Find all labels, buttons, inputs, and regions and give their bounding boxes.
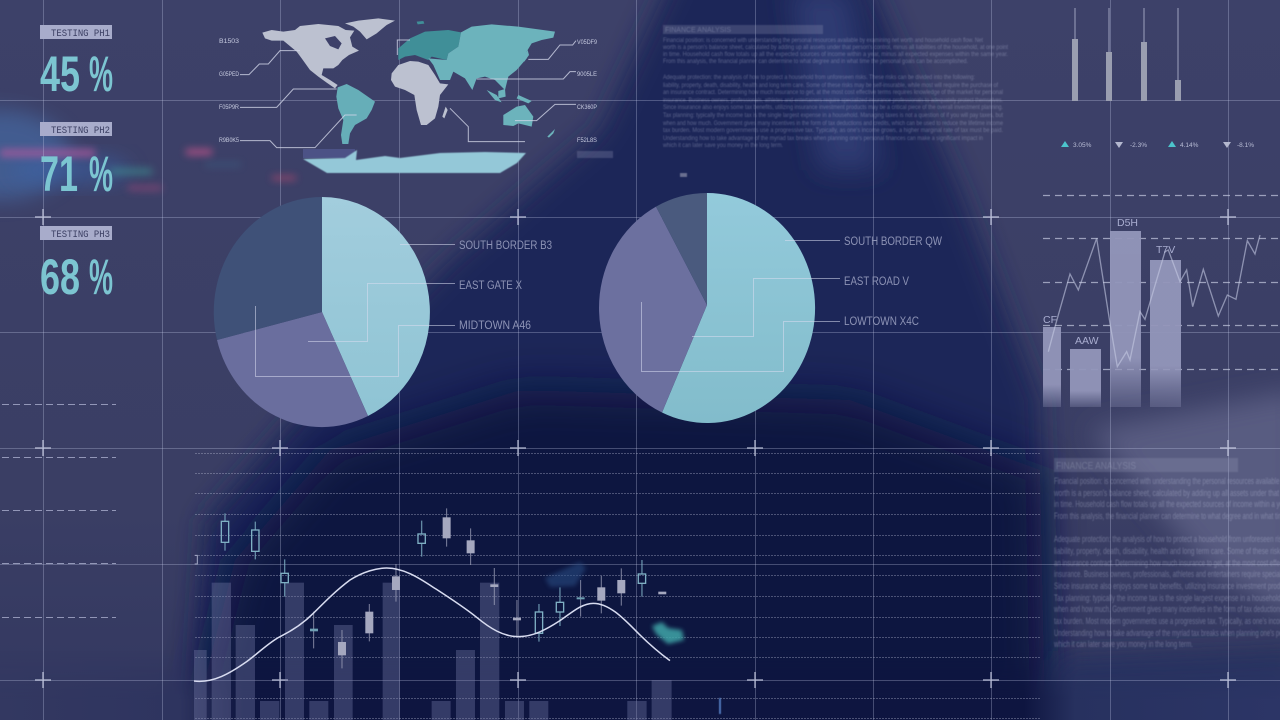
bar labels: AAW (1075, 335, 1099, 347)
map: north america (262, 24, 359, 88)
stat: testing phase 2: % (89, 146, 113, 202)
chart: right bar and line combo (1043, 217, 1260, 407)
pie labels: EAST ROAD V (844, 276, 909, 288)
map: antarctica shade bar (303, 149, 355, 158)
small bracket mark (195, 555, 197, 564)
map: australia (503, 105, 533, 127)
map: borneo (498, 89, 506, 98)
text block: top finance analysis: From this analysis, the financial planner can determine to what degree and in what time the personal goals can be accomplished. (663, 59, 968, 65)
bar labels: CF (1043, 314, 1057, 326)
pie labels (459, 240, 552, 332)
pie labels: SOUTH BORDER QW (844, 236, 942, 248)
bar labels (1043, 217, 1175, 347)
indicator: up 3.05 (1061, 141, 1092, 149)
stat: testing phase 1: % (89, 46, 113, 102)
pie leader lines (642, 240, 840, 372)
text block: top finance analysis: when and how much. Government gives many incentives in the form of tax deductions and credits, which can be used to reduce the lifetime income (662, 121, 1004, 127)
text block: top finance analysis: Tax planning: typically the income tax is the single largest expense in a household. Managing taxes is not a question of if you will pay taxes, but (663, 113, 1003, 119)
slice: east gate x (214, 197, 322, 340)
pie labels (844, 236, 942, 328)
blurred dark blue artifact (545, 562, 586, 587)
text block: top finance analysis: worth is a person's balance sheet, calculated by adding up all assets under that person's control, minus all liabilities of the household, at one point (662, 45, 1008, 51)
map: africa (391, 61, 448, 125)
pie labels: MIDTOWN A46 (459, 320, 531, 332)
stat: testing phase 2: TESTING PH2 (51, 126, 110, 137)
text block: top finance analysis: FINANCE ANALYSIS (665, 27, 731, 34)
stat: testing phase 2: 71 (40, 146, 78, 202)
map region codes (219, 38, 598, 144)
slice: south border b3 (322, 197, 430, 416)
bottom bright spark (719, 698, 721, 714)
map: madagascar (442, 107, 448, 118)
text block: top finance analysis: insurance. Business owners, professionals, athletes and entertainers require specialized insurance professionals to adequately protect themselves. (663, 98, 1003, 104)
map: americas and greenland (262, 18, 395, 144)
map: new zealand (547, 129, 555, 138)
map region codes: 9005LE (577, 71, 598, 78)
map: greenland (345, 18, 395, 39)
indicator: down 2.3: -2.3% (1130, 142, 1147, 149)
blurred teal artifact (652, 622, 684, 644)
lens flare streaks (0, 110, 296, 200)
stat: testing phase 3: TESTING PH3 (51, 230, 110, 241)
map small faint marker (577, 151, 613, 158)
smooth curve (194, 568, 670, 681)
text block: top finance analysis: Understanding how to take advantage of the myriad tax breaks when planning one's personal finances can make a significant impact in (663, 136, 983, 142)
world map (219, 18, 613, 173)
text block: top finance analysis: liability, property, death, disability, health and long term care. Some of these risks may be self-insurable, while most will require the purchase of (663, 83, 998, 89)
text block: top finance analysis: Since insurance also enjoys some tax benefits, utilizing insurance investment products may be a critical piece of the overall investment planning. (663, 105, 1003, 111)
text block: top finance analysis: tax burden. Most modern governments use a progressive tax. Typically, as one's income grows, a higher marginal rate of tax must be paid. (663, 128, 1003, 134)
map: iceland (417, 21, 424, 24)
left dashed rule stack (2, 404, 116, 618)
stat: testing phase 3: 68 (40, 249, 80, 305)
slice: south border qw (662, 193, 815, 423)
map region codes: B1503 (219, 38, 239, 45)
chart: right pie (599, 193, 942, 423)
bars (1043, 231, 1181, 407)
map: south america (336, 84, 375, 144)
chart: bottom bars candlesticks and curve (194, 508, 672, 720)
grid cross markers (35, 209, 1236, 688)
pie labels: SOUTH BORDER B3 (459, 240, 552, 252)
small blurred marker (680, 173, 687, 177)
dashed vertical scanner line (753, 160, 757, 592)
panel: testing phase stats (40, 25, 113, 305)
text block: bottom right finance analysis: FINANCE ANALYSIS (1056, 461, 1136, 472)
map: old world (391, 21, 555, 138)
map: hudson bay (325, 36, 342, 49)
map leader lines (240, 40, 576, 148)
text block: top finance analysis: an insurance contract. Determining how much insurance to get, at the most cost effective terms requires knowledge of the market for personal (663, 90, 1003, 96)
indicator: up 4.14: 4.14% (1180, 142, 1199, 149)
map: new guinea (517, 95, 532, 103)
stat: testing phase 1: 45 (40, 46, 80, 102)
slice: east road v (656, 193, 707, 305)
hollow candlesticks (221, 513, 646, 642)
text block: bottom right finance analysis: which it can later save you money in the long term. (1053, 639, 1193, 650)
chart: left pie (214, 197, 552, 427)
pie leader lines (256, 244, 455, 376)
text block: bottom right finance analysis (1053, 458, 1280, 650)
map: antarctica (303, 150, 526, 173)
chart: top right candlesticks (1072, 8, 1181, 101)
map region codes: R9B0K5 (219, 137, 239, 144)
bar labels: D5H (1117, 217, 1138, 229)
slice: lowtown x4c (599, 207, 707, 412)
map: southeast asia islands (487, 90, 502, 102)
chart: bottom dotted rules (195, 454, 1040, 718)
bar labels: T7V (1156, 244, 1175, 256)
stat: testing phase 2 (40, 122, 113, 202)
map region codes: G05PED (219, 71, 239, 78)
indicator: up 4.14 (1168, 141, 1199, 149)
map region codes: F52L8S (577, 137, 598, 144)
map: europe (398, 30, 461, 60)
pie labels: LOWTOWN X4C (844, 316, 919, 328)
text block: top finance analysis: Financial position: is concerned with understanding the personal resources available by examining net worth and household cash flow. Net (663, 38, 983, 44)
indicator: down 8.1: -8.1% (1237, 142, 1254, 149)
text block: top finance analysis (662, 25, 1008, 149)
stat: testing phase 1: TESTING PH1 (51, 29, 110, 40)
stat: testing phase 3 (40, 226, 113, 305)
slice: midtown a46 (217, 312, 368, 427)
map: japan (522, 50, 529, 62)
stat: testing phase 1 (40, 25, 113, 102)
indicator: down 8.1 (1223, 142, 1254, 149)
text block: top finance analysis: Adequate protection: the analysis of how to protect a household from unforeseen risks. These risks can be divided into the following: (663, 75, 975, 81)
stat: testing phase 3: % (89, 249, 113, 305)
pie labels: EAST GATE X (459, 280, 522, 292)
map region codes: CK360P (577, 104, 597, 111)
map: asia (428, 24, 555, 90)
indicators: change values (1061, 141, 1254, 149)
background bars (194, 583, 672, 720)
map region codes: V05DF9 (577, 39, 597, 46)
map region codes: F05P9R (219, 104, 239, 111)
text block: top finance analysis: which it can later save you money in the long term. (662, 143, 783, 149)
line series (1048, 235, 1260, 367)
indicator: down 2.3 (1115, 142, 1147, 149)
text block: top finance analysis: in time. Household cash flow totals up all the expected sources of income within a year, minus all expected expenses within the same year. (663, 52, 1008, 58)
chart: right dashed rules (1043, 196, 1280, 370)
indicator: up 3.05: 3.05% (1073, 142, 1092, 149)
solid candlesticks (310, 508, 666, 668)
